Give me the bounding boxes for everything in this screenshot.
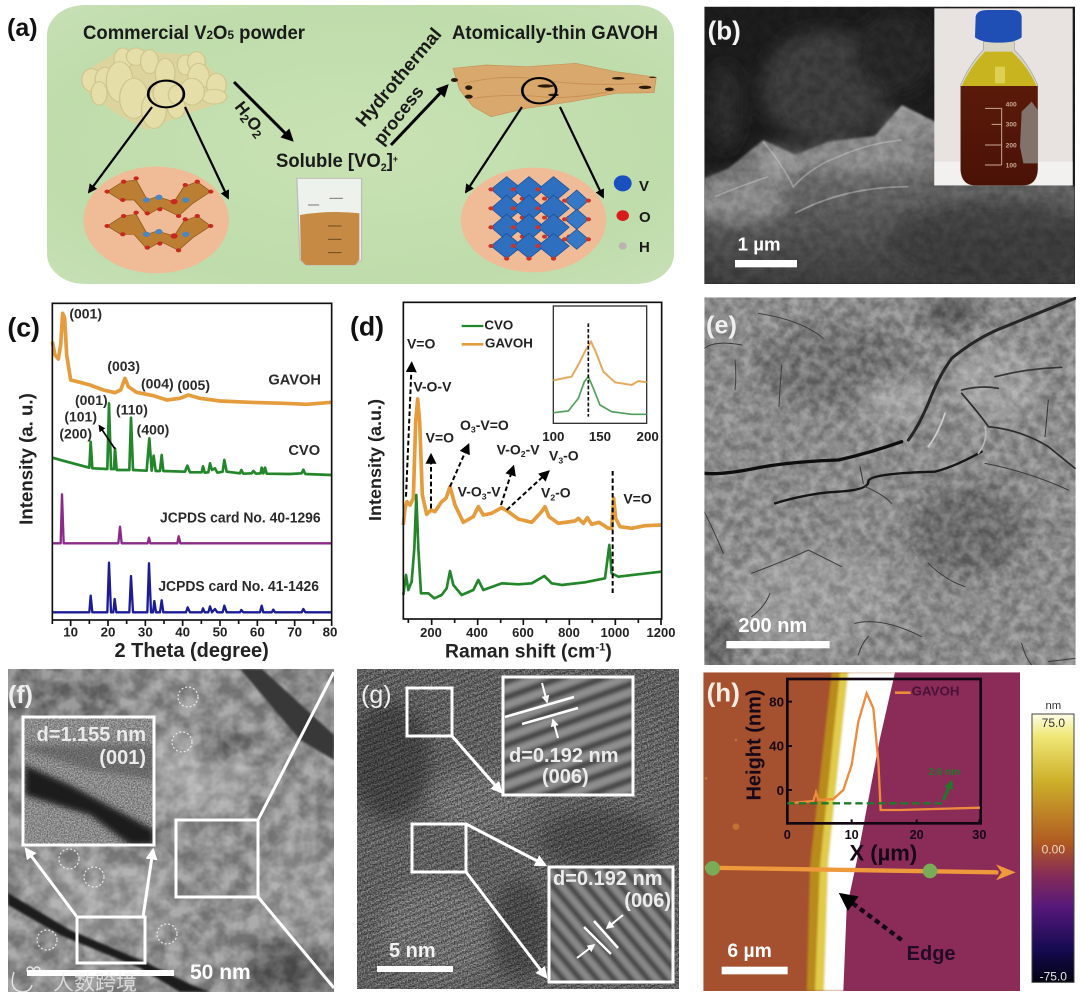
raman legend [462, 318, 533, 350]
panel g: HRTEM [350, 669, 680, 989]
AFM inset chart: Height (nm) [744, 689, 766, 801]
panel a labels: H [639, 239, 650, 256]
h scale bar [722, 941, 788, 974]
f dashed circles [37, 687, 198, 950]
f scale bar: 50 nm [190, 961, 251, 984]
panel a labels: Commercial V2O5 powder [83, 23, 306, 44]
raman peak labels: V [541, 485, 550, 501]
AFM right plateau [843, 672, 1020, 991]
CVO raman [403, 495, 661, 598]
raman axis ticks [420, 625, 675, 640]
panel label h: (h) [707, 678, 740, 708]
bottle body [961, 42, 1038, 185]
GAVOH nanosheet [451, 63, 656, 117]
peach circle left [83, 167, 229, 273]
raman axis ticks: 800 [558, 625, 580, 640]
raman peak labels: 3 [558, 455, 563, 465]
bottle label [1020, 102, 1038, 163]
raman axis ticks: 600 [512, 625, 534, 640]
SEM highlights [688, 113, 1080, 280]
xrd axis ticks [63, 624, 337, 639]
panel d: Raman chart [350, 302, 675, 663]
SEM ridge streaks [715, 140, 908, 213]
panel a labels: 2 [249, 127, 264, 142]
xrd peak labels [59, 305, 321, 595]
xrd y title: Intensity (a. u.) [16, 393, 37, 525]
SEM ridge [704, 105, 1075, 284]
panel f: TEM with inset [0, 665, 340, 998]
xrd axis ticks: 30 [138, 624, 153, 639]
raman peak labels: -V [487, 484, 501, 500]
panel label c: (c) [7, 313, 40, 343]
edge arrow and label: Edge [907, 943, 956, 965]
card 41-1426 curve [52, 563, 332, 612]
g scale bar: 5 nm [389, 940, 436, 962]
V2O5 layered structure [104, 176, 213, 252]
SEM top blobs [708, 13, 935, 150]
raman peak labels: 2 [550, 492, 555, 502]
raman peak labels: V=O [623, 490, 652, 506]
panel a labels: Soluble [VO [276, 151, 384, 172]
scale bar e [726, 615, 830, 648]
raman inset: 100 [542, 429, 564, 444]
panel h: AFM image [703, 672, 1020, 991]
raman x title: -1 [595, 641, 605, 653]
watermark: 人数跨境 [53, 967, 137, 997]
xrd peak labels: (001) [69, 305, 102, 321]
AFM edge band [807, 672, 900, 991]
raman legend: GAVOH [485, 335, 533, 350]
bottle inset: 100 [1006, 163, 1017, 170]
line profile arrow [705, 861, 1016, 880]
panel a shapes [82, 48, 656, 273]
arrows in panel a [89, 82, 603, 198]
g lower inset: d=0.192 nm [553, 868, 663, 890]
raman inset: 200 [637, 429, 659, 444]
AFM inset chart [744, 679, 986, 865]
panel label f: (f) [8, 681, 33, 709]
f inset [23, 717, 154, 845]
f zoom boxes and arrows [26, 672, 334, 988]
panel label g: (g) [361, 681, 392, 709]
colour scale bar [1032, 700, 1074, 983]
panel a labels: + [393, 154, 398, 164]
xrd peak labels: JCPDS card No. 41-1426 [158, 579, 319, 595]
f inset: d=1.155 nm [36, 724, 146, 746]
raman curves [403, 399, 661, 598]
raman axis ticks: 1000 [601, 625, 629, 640]
scale bar b: 1 µm [738, 234, 781, 255]
raman peak labels: V=O [426, 429, 454, 445]
colour scale bar: -75.0 [1040, 969, 1067, 983]
xrd peak labels: (004) [141, 375, 174, 391]
panel a labels: O [243, 113, 266, 135]
xrd axis titles: 2 Theta (degree) [114, 640, 269, 662]
AFM inset chart: 10 [845, 828, 859, 842]
AFM inset chart: 0 [784, 828, 791, 842]
colour scale bar: 75.0 [1042, 716, 1065, 730]
raman peak labels: O [460, 417, 471, 433]
V2O5 powder cluster [82, 48, 227, 130]
bottle cap [975, 10, 1022, 43]
scale bar b [735, 234, 797, 267]
xrd peak labels: GAVOH [268, 372, 321, 388]
raman peak labels: -V [526, 441, 540, 457]
xrd peak labels: JCPDS card No. 40-1296 [160, 510, 321, 526]
peach circle right [461, 168, 606, 272]
legend balls [614, 175, 632, 250]
g lower inset: (006) [624, 890, 671, 912]
lens circle right [522, 78, 556, 103]
raman axis ticks: 200 [420, 625, 442, 640]
xrd axis ticks: 20 [101, 624, 115, 639]
bottle inset [934, 8, 1073, 185]
xrd peak labels: (001) [75, 392, 108, 408]
xrd peak labels: (400) [137, 421, 169, 437]
raman peak labels: V-O [458, 484, 482, 500]
raman inset [542, 306, 659, 444]
raman peak labels: 2 [521, 449, 526, 459]
colour scale bar: 0.00 [1042, 843, 1065, 857]
xrd peak labels: (101) [64, 409, 97, 425]
raman peak labels: -O [555, 485, 571, 501]
panel a labels: V [639, 178, 649, 195]
TEM wrinkles [704, 298, 1075, 665]
g upper inset: d=0.192 nm [509, 745, 619, 767]
h scale bar: 6 µm [727, 941, 772, 962]
g lower inset [549, 867, 673, 982]
raman peak labels: 3 [471, 425, 476, 435]
xrd peak labels: CVO [288, 443, 320, 459]
raman peak labels: V-O-V [413, 379, 452, 395]
xrd peak labels: (003) [107, 358, 140, 374]
raman peak labels: V [549, 448, 558, 464]
edge arrow and label [842, 895, 956, 965]
f scale bar [27, 961, 251, 984]
raman peak labels [407, 335, 652, 506]
xrd axis ticks: 70 [287, 624, 302, 639]
f tonal blobs [0, 665, 340, 998]
xrd peak labels: (110) [116, 401, 148, 417]
panel a labels: 2 [237, 112, 252, 126]
watermark [12, 967, 137, 997]
panel a labels [83, 23, 658, 256]
bottle graduations [985, 108, 1002, 165]
AFM inset chart: 20 [910, 828, 924, 842]
xrd axis ticks: 80 [323, 624, 337, 639]
raman y title: Intensity (a.u.) [365, 399, 385, 521]
xrd frame and ticks [52, 303, 332, 626]
GAVOH raman [403, 399, 661, 528]
xrd arrow [99, 426, 115, 449]
lens circle left [148, 81, 184, 107]
xrd axis ticks: 10 [63, 624, 78, 639]
raman peak labels: V=O [407, 335, 435, 351]
raman legend: CVO [484, 318, 513, 333]
panel a labels: Hydrothermal [351, 24, 445, 131]
panel b: SEM image with bottle inset [704, 6, 1075, 284]
CVO curve [52, 403, 332, 475]
raman peak labels: -V=O [476, 417, 509, 433]
GAVOH crystal structure [488, 177, 591, 261]
g upper inset: (006) [542, 766, 589, 788]
AFM inset chart: 40 [769, 739, 784, 754]
raman axis ticks: 400 [466, 625, 488, 640]
panel a background [47, 5, 674, 284]
GAVOH curve [52, 313, 332, 404]
panel label a: (a) [7, 14, 38, 42]
f dark fold lower [8, 893, 210, 992]
card 40-1296 curve [52, 494, 332, 543]
panel a: synthesis schematic [47, 5, 674, 284]
xrd axis ticks: 40 [175, 624, 190, 639]
raman dashed arrows [406, 363, 613, 593]
panel a labels: H [231, 98, 253, 119]
panel label d: (d) [350, 312, 384, 342]
xrd axis ticks: 50 [213, 624, 227, 639]
xrd axis ticks: 60 [250, 624, 265, 639]
raman axis ticks: 1200 [647, 625, 675, 640]
bottle inset: 200 [1006, 142, 1017, 149]
panel a labels: ] [387, 151, 393, 172]
AFM inset chart: 30 [972, 828, 986, 842]
f dark fold upper [240, 669, 334, 760]
raman inset: 150 [589, 429, 611, 444]
panel e: TEM image [704, 297, 1076, 665]
AFM inset chart: 0 [777, 783, 784, 798]
AFM inset chart: 2.6 nm [928, 767, 960, 778]
panel a labels: O [639, 209, 651, 226]
xrd peak labels: (005) [177, 377, 210, 393]
raman x title: ) [605, 642, 612, 663]
raman x title: Raman shift (cm [445, 642, 595, 663]
panel label b: (b) [708, 15, 741, 45]
AFM inset chart: 80 [769, 694, 784, 709]
AFM inset chart: X (µm) [849, 840, 917, 865]
TEM tonal blobs [695, 297, 1038, 670]
f inset: (001) [99, 747, 146, 769]
panel a labels: 2 [381, 162, 387, 174]
xrd curves [52, 313, 332, 612]
g zoom boxes and arrows [407, 688, 546, 977]
AFM inset chart: GAVOH [912, 684, 960, 699]
raman peak labels: -O [563, 448, 579, 464]
colour scale bar: nm [1045, 700, 1061, 712]
raman peak labels: 3 [482, 491, 487, 501]
raman frame [403, 302, 662, 625]
panel a labels: Atomically-thin GAVOH [452, 23, 658, 44]
panel a labels: process [369, 82, 428, 148]
panel c: XRD chart [7, 303, 337, 662]
panel label e: (e) [706, 311, 737, 339]
g upper inset [503, 677, 633, 795]
beaker [297, 178, 362, 265]
g scale bar [377, 940, 453, 972]
xrd peak labels: (200) [59, 425, 92, 441]
bottle inset: 400 [1006, 102, 1017, 109]
raman peak labels: V-O [497, 441, 521, 457]
scale bar e: 200 nm [738, 615, 807, 637]
bottle inset: 300 [1006, 122, 1017, 129]
